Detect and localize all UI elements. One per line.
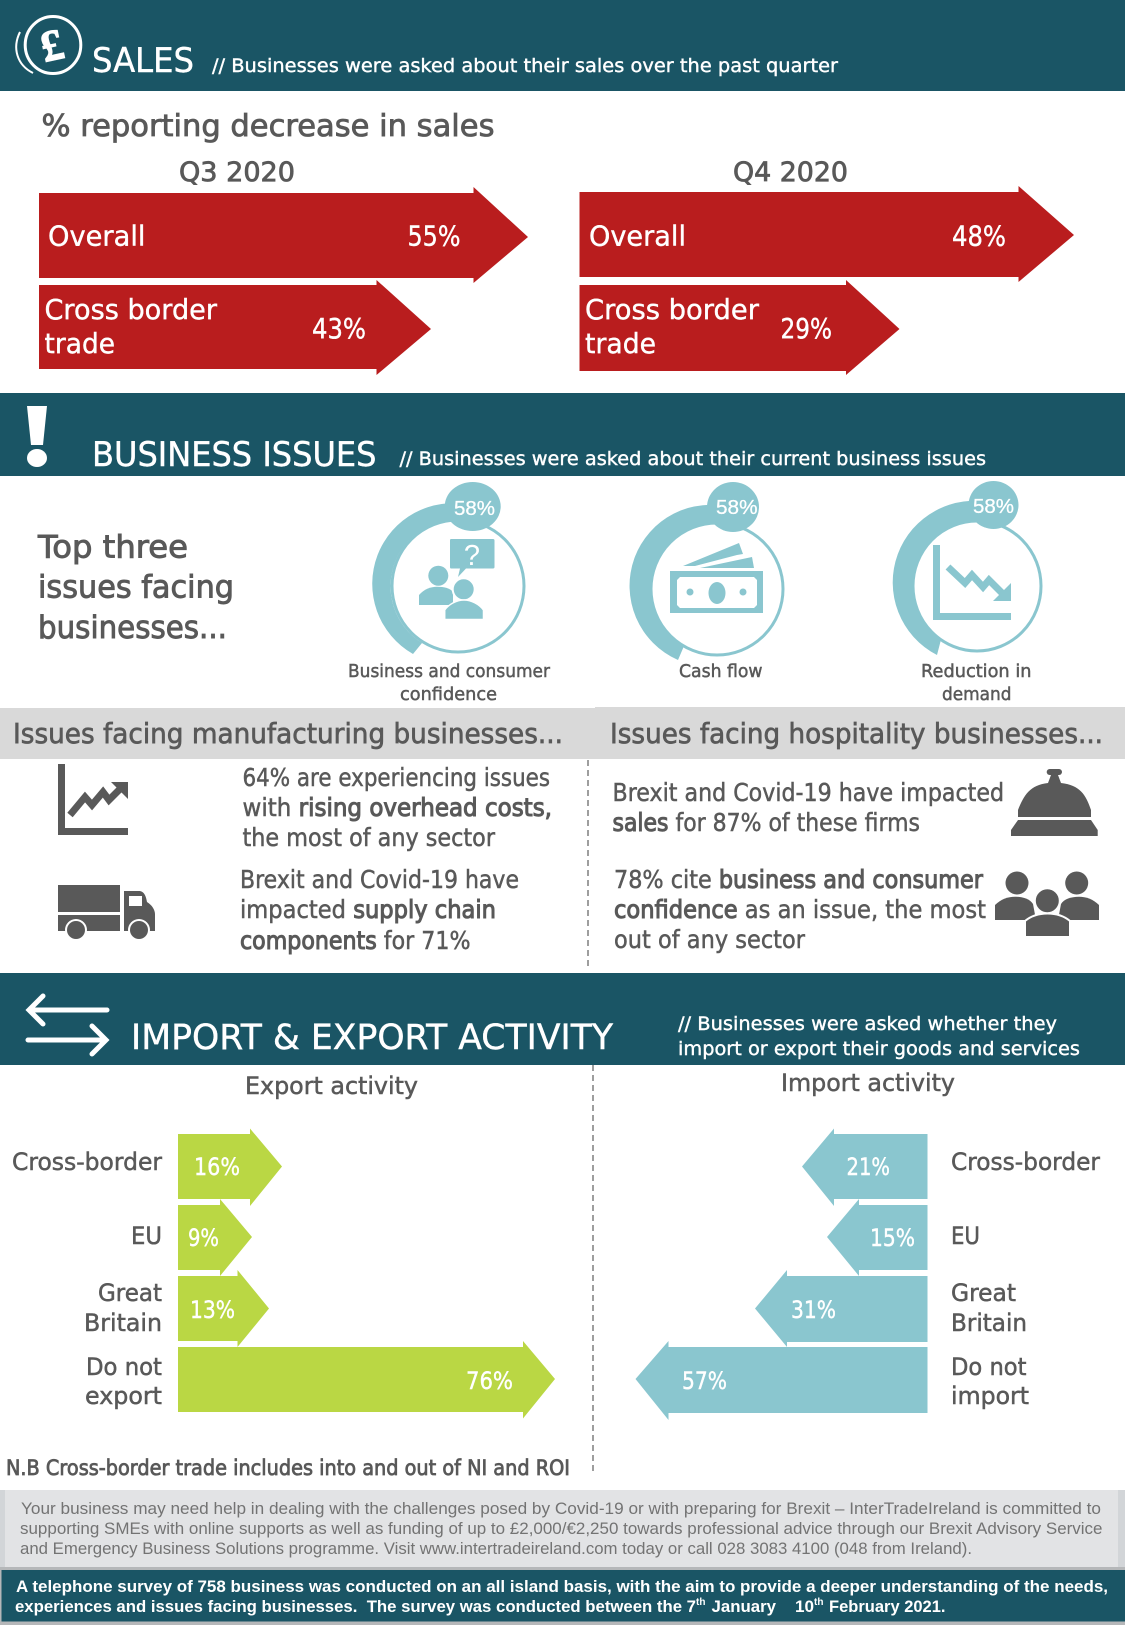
heading: top three issues: Top three (37, 530, 188, 566)
icon: two-way arrows (28, 996, 107, 1054)
arrow: Q3 cross border 43% (39, 280, 431, 375)
panel: survey note: January (712, 1598, 777, 1616)
sector heading band (0, 707, 1125, 759)
heading: top three issues: issues facing (38, 570, 234, 606)
text: confidence issue: out of any sector (614, 925, 806, 954)
sales subtitle: // Businesses were asked about their sales over the past quarter (212, 55, 838, 77)
heading: manufacturing issues: Issues facing manufacturing businesses... (13, 717, 563, 750)
icon: people with question bubble: ? (464, 540, 480, 572)
arrow: Q4 cross border 29%: trade (585, 327, 656, 360)
heading: top three issues: businesses... (38, 610, 227, 646)
import export subtitle (678, 1013, 1080, 1060)
label: Q4 2020: Q4 2020 (733, 157, 848, 188)
gauge: reduction in demand 58%: 58% (973, 495, 1014, 518)
arrow: export Great Britain 13% (178, 1270, 269, 1347)
arrow: export Great Britain 13%: 13% (190, 1296, 235, 1324)
arrow: do not export 76%: 76% (466, 1367, 513, 1395)
arrow: import EU 15% (827, 1199, 928, 1276)
label: business and consumer confidence (348, 661, 551, 705)
panel: support message: supporting SMEs with online supports as well as funding of up to £2,000/€2,250 towards professional advice through our Brexit Advisory Service (20, 1519, 1102, 1538)
panel: import and export activity (0, 973, 1125, 1480)
panel: survey note: experiences and issues facing businesses. The survey was conducted between the 7 (15, 1598, 696, 1616)
icon: group of people (995, 872, 1099, 937)
business issues heading: BUSINESS ISSUES (92, 435, 376, 475)
text: confidence issue (614, 865, 986, 954)
label: reduction in demand (921, 661, 1032, 705)
panel: survey note (0, 1567, 1125, 1625)
import row labels (951, 1148, 1100, 1410)
arrow: export EU 9% (178, 1199, 252, 1276)
text: rising overhead costs: with rising overhead costs, (242, 793, 552, 822)
chart: export arrows (178, 1128, 555, 1418)
label: Q3 2020: Q3 2020 (179, 157, 295, 188)
icon: truck (58, 885, 155, 941)
import row labels: EU (951, 1222, 980, 1250)
label: cash flow: Cash flow (679, 661, 762, 682)
text: rising overhead costs: 64% are experiencing issues (242, 763, 550, 792)
arrow: import cross-border 21%: 21% (846, 1153, 890, 1181)
text: supply chain components (240, 865, 519, 955)
import row labels: Great (951, 1279, 1016, 1307)
arrow: Q3 overall 55%: Overall (48, 220, 146, 252)
arrow: Q4 overall 48% (580, 186, 1074, 282)
gauge: business and consumer confidence 58% (348, 482, 551, 705)
import export subtitle: // Businesses were asked whether they (678, 1013, 1057, 1035)
arrow: Q3 cross border 43%: Cross border (44, 293, 217, 326)
label: reduction in demand: Reduction in (921, 661, 1032, 682)
icon: pound coin: £ (36, 19, 68, 72)
heading: hospitality issues: Issues facing hospitality businesses... (610, 717, 1103, 750)
sales header band (0, 0, 1125, 91)
icon: pound coin (16, 16, 81, 74)
text: sales impact (612, 778, 1004, 837)
panel: survey note: A telephone survey of 758 business was conducted on an all island basis, with the aim to provide a deeper understanding of the needs, (16, 1578, 1108, 1596)
export row labels: Cross-border (12, 1148, 162, 1176)
arrow: do not export 76% (178, 1341, 555, 1418)
text: sales impact: sales for 87% of these firms (612, 808, 920, 837)
arrow: do not import 57% (636, 1341, 928, 1420)
sales heading: SALES (92, 41, 194, 81)
panel: sales (0, 0, 1125, 375)
gauge: cash flow 58%: 58% (716, 496, 758, 519)
gauge: business and consumer confidence 58%: 58% (454, 497, 495, 520)
icon: exclamation mark (27, 406, 47, 467)
arrow: Q4 cross border 29% (580, 280, 900, 375)
heading: top three issues (37, 530, 234, 646)
label: reduction in demand: demand (942, 684, 1012, 705)
panel: survey note: 10 (795, 1598, 814, 1616)
arrow: import Great Britain 31%: 31% (791, 1296, 836, 1324)
arrow: export EU 9%: 9% (188, 1224, 219, 1252)
import row labels: Cross-border (951, 1148, 1100, 1176)
business issues subtitle: // Businesses were asked about their current business issues (400, 448, 986, 470)
panel: survey note: th (814, 1597, 823, 1608)
icon: people with question bubble (419, 539, 494, 620)
arrow: Q4 overall 48%: 48% (952, 220, 1006, 252)
panel: survey note: th (696, 1597, 705, 1608)
panel: survey note: February 2021. (829, 1598, 946, 1616)
arrow: Q3 overall 55%: 55% (408, 220, 460, 252)
import export header band (0, 973, 1125, 1065)
text: confidence issue: 78% cite business and consumer (614, 865, 984, 894)
footnote: cross-border definition: N.B Cross-border trade includes into and out of NI and ROI (6, 1456, 570, 1480)
chart: import arrows (636, 1128, 928, 1420)
icon: rising chart (58, 764, 128, 835)
icon: falling chart (933, 545, 1011, 620)
heading: import activity: Import activity (781, 1069, 955, 1097)
heading: export activity: Export activity (245, 1072, 418, 1100)
panel: business issues (0, 393, 1125, 705)
text: supply chain components: components for 71% (240, 926, 470, 955)
panel: sector issues (0, 707, 1125, 968)
label: business and consumer confidence: confidence (400, 684, 497, 705)
text: supply chain components: Brexit and Covid-19 have (240, 865, 519, 894)
arrow: export cross-border 16%: 16% (194, 1153, 240, 1181)
import export subtitle: import or export their goods and services (678, 1038, 1080, 1060)
gauge: reduction in demand 58% (893, 481, 1041, 705)
arrow: do not import 57%: 57% (682, 1367, 727, 1395)
panel: support message: Your business may need help in dealing with the challenges posed by Covid-19 or with preparing for Brexit – InterTradeIreland is committed to (21, 1499, 1101, 1518)
arrow: import EU 15%: 15% (870, 1224, 915, 1252)
export row labels: Britain (84, 1309, 162, 1337)
text: rising overhead costs (242, 763, 552, 852)
icon: service bell (1011, 769, 1098, 836)
export row labels: Great (98, 1279, 162, 1307)
panel: support message: and Emergency Business Solutions programme. Visit www.intertradeireland.com today or call 028 3083 4100 (048 from Ireland). (20, 1539, 972, 1558)
import row labels: Do not (951, 1353, 1026, 1381)
export row labels (12, 1148, 162, 1410)
text: supply chain components: impacted supply chain (240, 895, 496, 924)
text: confidence issue: confidence as an issue, the most (614, 895, 986, 924)
business issues header band (0, 393, 1125, 476)
arrow: Q3 cross border 43%: trade (44, 327, 115, 360)
icon: banknotes (670, 543, 763, 613)
import export heading: IMPORT & EXPORT ACTIVITY (131, 1018, 614, 1058)
export row labels: Do not (86, 1353, 162, 1381)
import row labels: Britain (951, 1309, 1027, 1337)
arrow: import cross-border 21% (802, 1128, 928, 1206)
arrow: Q3 overall 55% (39, 187, 528, 283)
panel: support message (0, 1490, 1125, 1567)
heading: percent reporting decrease: % reporting decrease in sales (42, 109, 494, 144)
label: business and consumer confidence: Business and consumer (348, 661, 551, 682)
export row labels: export (85, 1382, 162, 1410)
text: sales impact: Brexit and Covid-19 have impacted (612, 778, 1004, 807)
arrow: import Great Britain 31% (755, 1270, 928, 1347)
text: rising overhead costs: the most of any sector (242, 823, 496, 852)
arrow: export cross-border 16% (178, 1128, 282, 1206)
arrow: Q4 cross border 29%: Cross border (585, 293, 759, 326)
import row labels: import (951, 1382, 1029, 1410)
gauge: cash flow 58% (630, 482, 783, 682)
arrow: Q4 overall 48%: Overall (589, 220, 686, 252)
arrow: Q4 cross border 29%: 29% (780, 312, 832, 345)
arrow: Q3 cross border 43%: 43% (312, 312, 366, 345)
export row labels: EU (131, 1222, 162, 1250)
